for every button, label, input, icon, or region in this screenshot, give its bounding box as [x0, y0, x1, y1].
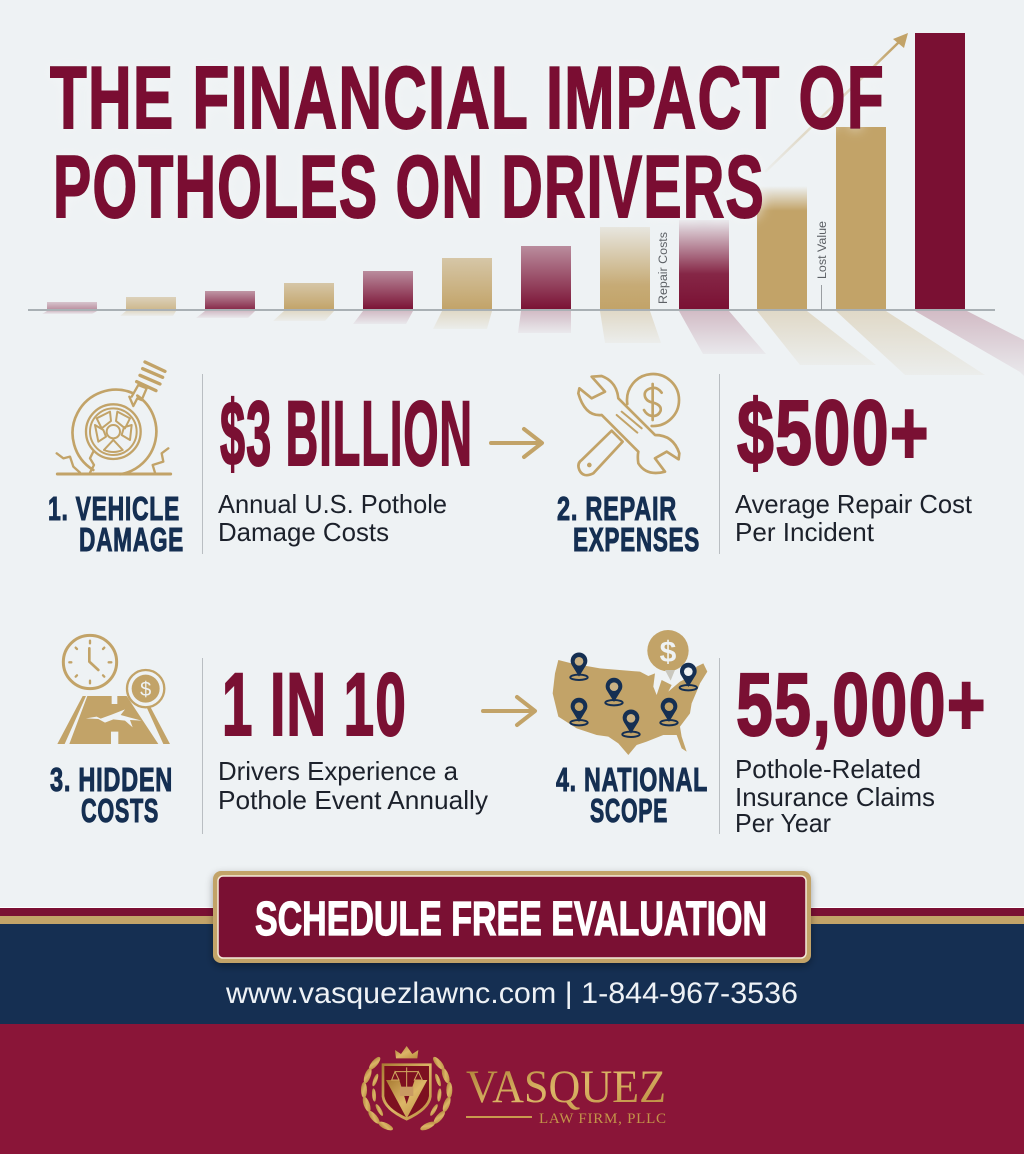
description — [735, 754, 935, 838]
label: national scope — [556, 761, 708, 829]
icon: clock, road crack and coin: $ — [140, 679, 151, 701]
icon: clock, road crack and coin — [57, 635, 170, 744]
bar label: repair costs: Repair Costs — [658, 232, 670, 304]
stat: 500 plus: $500+ — [737, 382, 930, 484]
panel: repair expenses — [557, 374, 973, 558]
contact line: www.vasquezlawnc.com | 1-844-967-3536 — [225, 977, 798, 1010]
logo wordmark: VASQUEZ — [466, 1061, 666, 1113]
icon: wrench and dollar coin — [578, 374, 679, 475]
icon: US map with pins — [553, 630, 707, 755]
label: hidden costs: COSTS — [81, 792, 159, 829]
growth arrow — [765, 33, 908, 172]
arrow — [483, 697, 535, 725]
label: repair expenses: EXPENSES — [573, 521, 700, 558]
bar label: lost value: Lost Value — [817, 221, 829, 279]
description: Drivers Experience a — [218, 756, 459, 786]
description: Per Year — [735, 808, 831, 838]
bar reflections — [42, 311, 1024, 376]
button: schedule free evaluation — [213, 871, 811, 963]
label: vehicle damage: 1. VEHICLE — [48, 490, 180, 527]
label: repair expenses — [557, 490, 700, 558]
stat: 1 in 10: 1 IN 10 — [222, 654, 407, 754]
description: Pothole Event Annually — [218, 785, 488, 815]
label: hidden costs: 3. HIDDEN — [50, 761, 173, 798]
description — [735, 489, 973, 547]
description: Average Repair Cost — [735, 489, 973, 519]
label: vehicle damage — [48, 490, 184, 558]
icon: US map with pins: $ — [660, 636, 677, 669]
bar label: lost value — [817, 221, 829, 310]
footer band — [0, 907, 1024, 1024]
panel: vehicle damage — [48, 362, 473, 558]
chart: rising bars with reflections — [28, 33, 1024, 376]
logo crest — [361, 1046, 452, 1132]
description: Per Incident — [735, 517, 875, 547]
description — [218, 489, 447, 547]
icon: damaged tire — [57, 362, 171, 474]
button: schedule free evaluation: SCHEDULE FREE EVALUATION — [255, 893, 767, 946]
description: Annual U.S. Pothole — [218, 489, 447, 519]
bars — [47, 33, 965, 310]
label: national scope: 4. NATIONAL — [556, 761, 708, 798]
description: Insurance Claims — [735, 782, 935, 812]
label: vehicle damage: DAMAGE — [79, 521, 184, 558]
label: national scope: SCOPE — [590, 792, 668, 829]
title — [50, 48, 885, 236]
text: $3 BILLION — [220, 383, 473, 485]
logo wordmark: LAW FIRM, PLLC — [539, 1111, 666, 1127]
logo footer — [0, 1024, 1024, 1154]
panel: national scope — [553, 630, 987, 838]
description: Damage Costs — [218, 517, 389, 547]
description: Pothole-Related — [735, 754, 921, 784]
label: repair expenses: 2. REPAIR — [557, 490, 677, 527]
baseline — [28, 309, 995, 311]
arrow — [491, 429, 542, 457]
description — [218, 756, 488, 815]
panel: hidden costs — [50, 635, 488, 829]
label: hidden costs — [50, 761, 173, 829]
